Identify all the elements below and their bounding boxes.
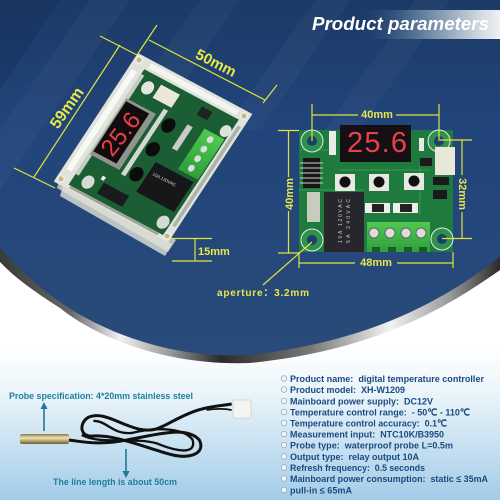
small parts xyxy=(420,158,449,199)
relay label: 10A 120VAC xyxy=(152,171,178,188)
spec: model: Product model: XH-W1209 xyxy=(290,385,405,396)
stainless probe xyxy=(20,434,69,444)
label: 40mm top: 40mm xyxy=(361,109,393,121)
display reading: 25.6 xyxy=(96,107,147,162)
button left xyxy=(335,174,355,191)
connector xyxy=(435,147,455,175)
display reading: 25.6 xyxy=(347,127,407,159)
chip xyxy=(97,183,129,207)
mount: top right xyxy=(217,123,234,139)
device in acrylic case xyxy=(54,53,252,256)
acrylic case xyxy=(54,53,252,243)
arrow: up to probe label xyxy=(40,402,48,431)
screws xyxy=(58,57,247,239)
spec: accuracy: Temperature control accuracy: 0.1℃ xyxy=(290,418,447,430)
line length label: The line length is about 50cm xyxy=(53,477,177,488)
display xyxy=(340,125,411,162)
probe connector xyxy=(233,400,251,418)
chip xyxy=(300,158,323,188)
terminal block xyxy=(178,129,224,180)
spec: input: Measurement input: NTC10K/B3950 xyxy=(290,430,444,440)
relay label 2: 5A 240VAC xyxy=(346,199,352,243)
terminal block xyxy=(367,222,430,252)
mounting hole: top left xyxy=(301,130,323,152)
diode right xyxy=(393,203,418,213)
bare circuit board xyxy=(299,125,455,252)
spec: pull-in: pull-in ≤ 65mA xyxy=(290,486,352,496)
label: 48mm: 48mm xyxy=(360,257,392,269)
mounting hole: bottom left xyxy=(301,229,323,251)
spec: refresh: Refresh frequency: 0.5 seconds xyxy=(290,463,425,474)
label: aperture: aperture：3.2mm xyxy=(217,288,309,299)
probe specification label: Probe specification: 4*20mm stainless steel xyxy=(9,391,193,402)
mount: top left xyxy=(138,79,157,97)
spec: output: Output type: relay output 10A xyxy=(290,452,419,463)
diode left xyxy=(365,203,390,213)
spec: name: Product name: digital temperature controller xyxy=(290,374,484,385)
circuit board xyxy=(69,69,239,235)
label: 15mm: 15mm xyxy=(198,246,230,258)
mount: bottom left xyxy=(79,173,97,191)
display frame xyxy=(90,98,156,170)
mount: bottom right xyxy=(154,213,172,231)
relay xyxy=(324,192,364,252)
mounting hole: bottom right xyxy=(431,228,453,250)
bullets xyxy=(281,376,287,493)
probe cable xyxy=(68,404,232,456)
led component xyxy=(419,138,424,151)
label: 32mm: 32mm xyxy=(456,178,468,210)
button right xyxy=(404,173,424,190)
spec: range: Temperature control range: - 50℃ - 110℃ xyxy=(290,408,470,418)
mounting hole: top right xyxy=(428,130,450,152)
label: 40mm side: 40mm xyxy=(284,178,296,210)
relay label: 10A 120VAC xyxy=(338,199,344,243)
silver rim of the blue panel xyxy=(0,0,500,363)
title ribbon xyxy=(360,10,500,39)
button 3 xyxy=(126,165,146,184)
button 1 xyxy=(158,116,178,135)
connector xyxy=(153,85,180,108)
relay xyxy=(136,162,194,212)
blue panel xyxy=(0,0,500,356)
arrow: down to length label xyxy=(122,449,130,478)
label: 50mm: 50mm xyxy=(193,46,239,81)
resistor strip xyxy=(307,192,320,222)
display xyxy=(93,101,149,164)
inner acrylic strip xyxy=(76,74,144,176)
dimension lines of case xyxy=(14,25,277,261)
spec: power: Mainboard power supply: DC12V xyxy=(290,396,434,408)
dimension lines of board xyxy=(263,104,472,285)
spec list xyxy=(281,374,488,496)
spec: consumption: Mainboard power consumption: static ≤ 35mA xyxy=(290,474,488,485)
label: 59mm: 59mm xyxy=(47,84,88,132)
pads xyxy=(329,131,336,155)
button 2 xyxy=(143,140,163,159)
heading: Product parameters xyxy=(312,14,489,34)
button middle xyxy=(369,174,389,191)
spec: probe: Probe type: waterproof probe L=0.5m xyxy=(290,440,453,452)
